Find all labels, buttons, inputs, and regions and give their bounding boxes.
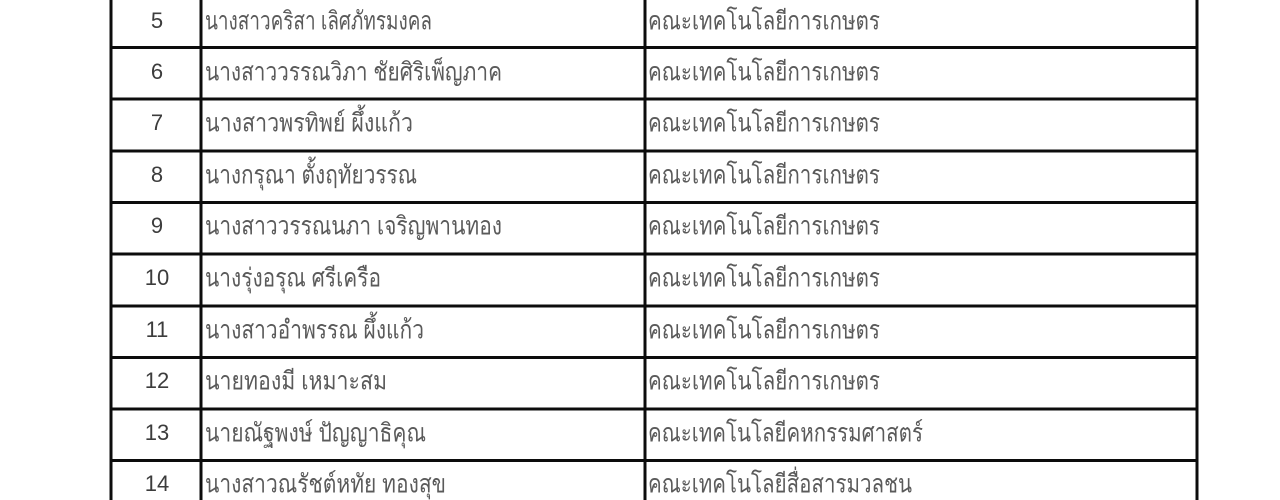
row 6: คณะเทคโนโลยีการเกษตร bbox=[648, 58, 880, 86]
row 12: นายทองมี เหมาะสม bbox=[205, 368, 387, 396]
row 11 bbox=[146, 312, 880, 344]
row 10: คณะเทคโนโลยีการเกษตร bbox=[648, 264, 880, 292]
row 11: นางสาวอำพรรณ ผึ้งแก้ว bbox=[205, 312, 424, 344]
row 13 bbox=[145, 418, 923, 448]
row 6 bbox=[151, 56, 880, 86]
row 10: นางรุ่งอรุณ ศรีเครือ bbox=[205, 264, 381, 294]
row 14: 14 bbox=[145, 471, 169, 496]
row 10: 10 bbox=[145, 265, 169, 290]
row 9 bbox=[151, 212, 880, 240]
row 5: 5 bbox=[151, 8, 163, 33]
row 14: นางสาวณรัชต์หทัย ทองสุข bbox=[205, 470, 446, 500]
row 12: คณะเทคโนโลยีการเกษตร bbox=[648, 366, 880, 396]
row 8: นางกรุณา ตั้งฤทัยวรรณ bbox=[205, 156, 417, 190]
row 9: คณะเทคโนโลยีการเกษตร bbox=[648, 212, 880, 240]
row 14 bbox=[145, 466, 912, 500]
row 6: นางสาววรรณวิภา ชัยศิริเพ็ญภาค bbox=[205, 56, 502, 86]
row 8: คณะเทคโนโลยีการเกษตร bbox=[648, 160, 880, 190]
row 11: คณะเทคโนโลยีการเกษตร bbox=[648, 316, 880, 344]
row 12 bbox=[145, 366, 880, 396]
row 7: 7 bbox=[151, 110, 163, 135]
row 8: 8 bbox=[151, 162, 163, 187]
row 5 bbox=[151, 6, 880, 36]
row 7: คณะเทคโนโลยีการเกษตร bbox=[648, 108, 880, 138]
row 7 bbox=[151, 104, 880, 138]
row 9: 9 bbox=[151, 213, 163, 238]
row 7: นางสาวพรทิพย์ ผึ้งแก้ว bbox=[205, 104, 413, 138]
row 14: คณะเทคโนโลยีสื่อสารมวลชน bbox=[648, 466, 912, 498]
row 11: 11 bbox=[146, 317, 168, 342]
row 6: 6 bbox=[151, 59, 163, 84]
row 5: นางสาวคริสา เลิศภัทรมงคล bbox=[205, 8, 432, 36]
row 13: คณะเทคโนโลยีคหกรรมศาสตร์ bbox=[648, 418, 923, 448]
row 10 bbox=[145, 264, 880, 294]
row 13: นายณัฐพงษ์ ปัญญาธิคุณ bbox=[205, 418, 426, 448]
row 13: 13 bbox=[145, 420, 169, 445]
row 9: นางสาววรรณนภา เจริญพานทอง bbox=[205, 212, 502, 240]
row 12: 12 bbox=[145, 368, 169, 393]
row 5: คณะเทคโนโลยีการเกษตร bbox=[648, 6, 880, 36]
row 8 bbox=[151, 156, 880, 190]
